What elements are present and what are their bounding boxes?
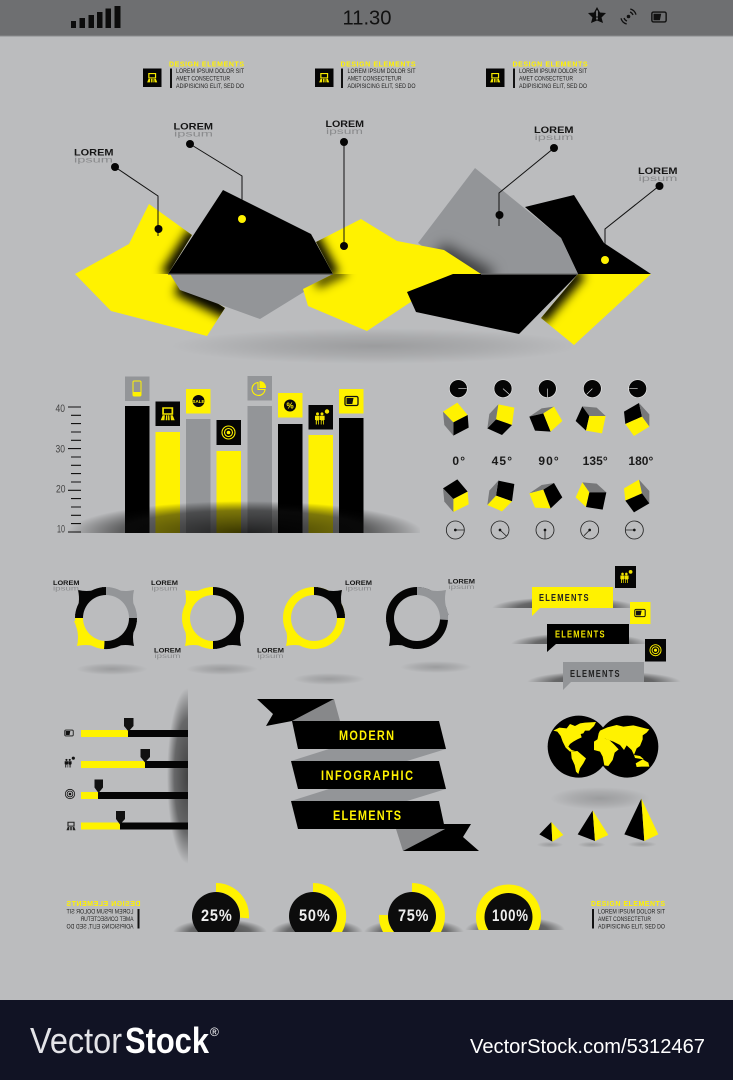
donut chart 2: LOREM	[154, 648, 181, 654]
text block: design elements 2: AMET CONSECTETUR	[348, 76, 402, 82]
donut chart 4	[386, 578, 475, 673]
top cubes	[443, 403, 649, 436]
icon: people tag	[615, 566, 636, 588]
degree labels: 0°	[452, 454, 465, 468]
axis labels: 10	[57, 524, 65, 536]
callout 2: ipsum	[174, 128, 213, 138]
clock time: 11.30	[342, 8, 392, 30]
bars	[125, 406, 364, 533]
callout 3: LOREM	[326, 119, 364, 130]
axis labels: 20	[56, 484, 66, 496]
icon: pie	[248, 376, 272, 400]
donut chart 1: ipsum	[53, 586, 79, 592]
callout 4: LOREM	[534, 125, 574, 136]
ribbon panel: infographic	[291, 761, 446, 789]
text block: design elements 2: ADIPISICING ELIT, SED DO	[348, 84, 416, 90]
donut chart 3: LOREM	[345, 580, 372, 587]
ribbon panel: infographic: INFOGRAPHIC	[321, 768, 413, 784]
icon: wireless	[621, 9, 636, 24]
icon: star alert	[588, 7, 606, 23]
speech ribbon labels	[492, 566, 681, 693]
callout 1: LOREM	[74, 148, 114, 158]
ribbon panel: elements	[291, 801, 445, 829]
continents	[553, 722, 649, 774]
ribbon: black: ELEMENTS	[555, 628, 605, 640]
registered mark: ®	[210, 1025, 219, 1039]
axis labels	[56, 403, 66, 536]
bar base shadow	[72, 502, 418, 533]
text block: design elements 3: DESIGN ELEMENTS	[512, 62, 588, 68]
donut chart 2: ipsum	[152, 586, 178, 592]
icon: battery	[652, 12, 666, 22]
bottom dials	[446, 521, 643, 539]
footer image id: VectorStock.com/5312467	[470, 1036, 705, 1058]
slider 1	[65, 718, 188, 737]
grey peak facet	[418, 168, 578, 280]
icon: percent: %	[286, 402, 294, 410]
icon: percent	[278, 393, 302, 418]
ribbon panel: modern	[292, 721, 446, 749]
right yellow facet	[539, 272, 651, 345]
ribbon: yellow: ELEMENTS	[539, 592, 589, 603]
callout 2	[174, 122, 246, 223]
text block: design elements 1: DESIGN ELEMENTS	[169, 62, 244, 68]
axis labels: 30	[56, 444, 65, 456]
bottom cubes	[443, 479, 649, 512]
text block: design elements 3: AMET CONSECTETUR	[519, 76, 574, 82]
gauge 75 percent: 75%	[398, 907, 429, 925]
degree labels: 90°	[538, 454, 559, 468]
grey lower facet	[170, 274, 333, 319]
degree labels	[452, 454, 654, 468]
status bar	[0, 0, 733, 36]
top dials	[449, 380, 647, 398]
folded ribbon title	[257, 699, 479, 851]
text block: design elements right: AMET CONSECTETUR	[598, 917, 652, 923]
callout 1: ipsum	[74, 154, 113, 164]
right black facet	[525, 195, 651, 274]
middle yellow shape	[303, 219, 481, 331]
bar chart	[56, 376, 418, 533]
donut chart 4: ipsum	[448, 585, 474, 591]
icon: laptop	[156, 402, 180, 426]
gauge 25 percent: 25%	[201, 907, 232, 925]
callout 4: ipsum	[534, 132, 574, 142]
donut chart 1	[53, 580, 148, 675]
slider chart	[64, 691, 188, 861]
gauge 50 percent	[272, 883, 362, 932]
donut chart 2: LOREM	[151, 580, 178, 587]
callout 3	[326, 119, 364, 250]
text block: design elements 1: AMET CONSECTETUR	[176, 76, 231, 82]
donut chart 3: LOREM	[257, 648, 284, 654]
callout 5: LOREM	[638, 166, 678, 177]
hero polygon chart	[74, 119, 678, 364]
mirrored text block: DESIGN ELEMENTS	[66, 901, 140, 908]
text block: design elements right: LOREM IPSUM DOLOR SIT	[598, 910, 665, 916]
callout 2: LOREM	[174, 122, 213, 132]
slider 4	[66, 811, 188, 830]
ribbon: black	[514, 624, 645, 652]
text block: design elements 2	[315, 62, 416, 90]
footer logo: Vector	[30, 1020, 122, 1061]
axis ticks	[68, 407, 81, 532]
icon: signal bars	[71, 6, 120, 28]
donut chart 2	[151, 580, 258, 675]
mirrored text block: ADIPISICING ELIT, SED DO	[66, 924, 134, 930]
donut chart 3	[257, 580, 372, 685]
mirrored text block	[66, 901, 140, 930]
callout 1	[74, 148, 162, 236]
donut chart 4: LOREM	[448, 578, 475, 586]
gauge 50 percent: 50%	[299, 907, 330, 925]
world globes	[548, 716, 658, 810]
text block: design elements right: DESIGN ELEMENTS	[591, 901, 665, 908]
footer bar	[0, 1000, 733, 1080]
gauge 100 percent	[466, 884, 563, 930]
slider 2	[65, 749, 188, 768]
text block: design elements 1: LOREM IPSUM DOLOR SIT	[176, 69, 244, 75]
cube rotation grid	[443, 380, 654, 539]
degree labels: 45°	[492, 454, 512, 468]
ribbon panel: elements: ELEMENTS	[333, 808, 401, 824]
text block: design elements 1: ADIPISICING ELIT, SED DO	[176, 84, 244, 90]
icon: target	[216, 420, 241, 445]
gauge 25 percent	[174, 883, 266, 932]
text block: design elements 3	[486, 62, 588, 90]
ribbon panel: modern: MODERN	[339, 728, 394, 744]
ribbon: grey	[530, 662, 678, 690]
icon: people	[308, 405, 333, 430]
ribbon: yellow	[494, 587, 630, 616]
left yellow shape	[75, 204, 232, 336]
callout 3: ipsum	[326, 126, 363, 136]
callout 5	[601, 166, 678, 264]
callout 4	[496, 125, 574, 226]
text block: design elements 2: DESIGN ELEMENTS	[340, 62, 416, 68]
donut chart 2: ipsum	[154, 654, 180, 660]
degree labels: 180°	[628, 454, 654, 468]
donut chart 1: LOREM	[53, 580, 80, 587]
icon: battery tag	[630, 602, 650, 624]
icon: sale badge: SALE	[192, 399, 205, 404]
mirrored text block: LOREM IPSUM DOLOR SIT	[66, 910, 134, 916]
text block: design elements right	[591, 901, 665, 930]
text block: design elements 1	[143, 62, 244, 90]
callout 5: ipsum	[638, 173, 678, 183]
donut chart 3: ipsum	[258, 654, 284, 660]
degree labels: 135°	[583, 454, 608, 468]
slider 3	[65, 780, 188, 799]
text block: design elements 3: LOREM IPSUM DOLOR SIT	[519, 69, 587, 75]
donut chart 3: ipsum	[346, 586, 372, 592]
black upper facet	[168, 190, 333, 274]
mirrored text block: AMET CONSECTETUR	[80, 917, 134, 923]
text block: design elements right: ADIPISICING ELIT, SED DO	[598, 924, 665, 930]
black lower facet	[407, 274, 578, 334]
icon: phone	[125, 376, 150, 401]
gauge 75 percent	[366, 883, 462, 932]
ribbon: grey: ELEMENTS	[570, 668, 620, 679]
pyramid set	[537, 799, 658, 848]
text block: design elements 2: LOREM IPSUM DOLOR SIT	[348, 69, 416, 75]
text block: design elements 3: ADIPISICING ELIT, SED DO	[519, 84, 587, 90]
footer logo: Stock	[125, 1020, 210, 1061]
icon: sale badge	[186, 389, 210, 414]
icon: target tag	[645, 639, 666, 662]
gauge 100 percent: 100%	[492, 906, 528, 925]
axis labels: 40	[56, 403, 65, 415]
icon: battery	[339, 389, 364, 414]
